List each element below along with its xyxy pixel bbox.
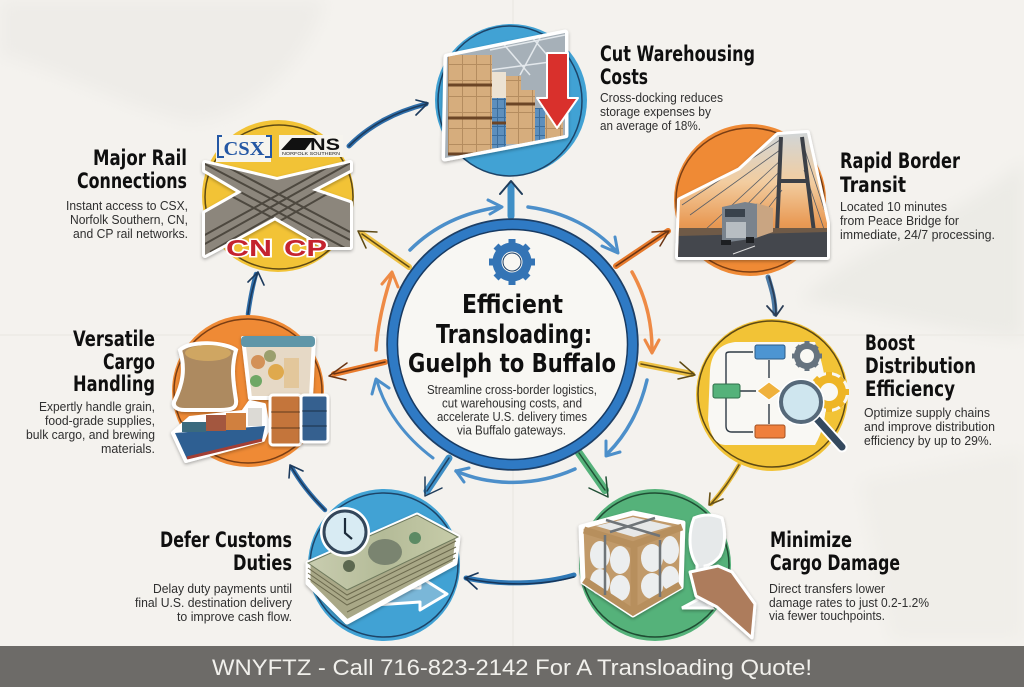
heading: Versatile bbox=[73, 327, 155, 351]
spoke: to cargo damage bbox=[579, 453, 608, 497]
description: Located 10 minutes bbox=[840, 200, 947, 214]
description: to improve cash flow. bbox=[177, 610, 292, 624]
hub ring bbox=[388, 220, 638, 470]
panel: defer customs duties bbox=[135, 489, 460, 641]
title: Transloading: bbox=[436, 320, 592, 350]
description: final U.S. destination delivery bbox=[135, 596, 293, 610]
CN CP logos: CN bbox=[226, 235, 272, 261]
description: Optimize supply chains bbox=[864, 406, 990, 420]
spoke: to bridge bbox=[616, 231, 669, 266]
description: Norfolk Southern, CN, bbox=[70, 213, 188, 227]
footer call to action: WNYFTZ - Call 716-823-2142 For A Transloading Quote! bbox=[212, 655, 812, 680]
icon: food container bbox=[241, 336, 315, 398]
central hub bbox=[388, 220, 638, 470]
warehouse illustration bbox=[445, 30, 578, 160]
arrow: rail to warehouse bbox=[349, 100, 428, 146]
arrow: distribution to cargo damage bbox=[709, 465, 739, 505]
spoke: to distribution bbox=[641, 362, 695, 379]
icon: grain sack bbox=[174, 343, 236, 410]
arrow: bridge to distribution bbox=[767, 277, 783, 316]
green circle bbox=[579, 489, 731, 641]
wine glass and hand illustration bbox=[682, 515, 755, 638]
panel: cut warehousing costs bbox=[435, 24, 755, 176]
title: Guelph to Buffalo bbox=[408, 349, 616, 379]
hub description bbox=[427, 383, 597, 438]
heading: Transit bbox=[840, 173, 906, 197]
heading: Defer Customs bbox=[160, 528, 292, 552]
spokes radiating from the central hub bbox=[329, 181, 695, 497]
blue circle bbox=[435, 24, 587, 176]
spoke: to customs duties bbox=[425, 458, 449, 496]
icon: red down arrow bbox=[537, 53, 578, 128]
flowchart illustration bbox=[708, 341, 849, 447]
rail crossing illustration bbox=[200, 135, 355, 261]
NS logo: NS bbox=[310, 135, 340, 154]
description: damage rates to just 0.2-1.2% bbox=[769, 596, 929, 610]
description: via fewer touchpoints. bbox=[769, 609, 885, 623]
CN CP logos: CP bbox=[284, 235, 327, 261]
NS logo bbox=[279, 135, 343, 157]
heading: Connections bbox=[77, 169, 187, 193]
description: Expertly handle grain, bbox=[39, 400, 155, 414]
padded crate illustration bbox=[581, 513, 683, 615]
heading: Efficiency bbox=[865, 377, 955, 401]
description: storage expenses by bbox=[600, 105, 712, 119]
heading: Costs bbox=[600, 65, 648, 89]
outer arrows connecting the benefit circles bbox=[248, 100, 783, 589]
description: Instant access to CSX, bbox=[66, 199, 188, 213]
description: materials. bbox=[101, 442, 155, 456]
icon: barrels bbox=[270, 395, 328, 445]
icon: arrow bbox=[375, 577, 447, 610]
spoke: to cargo handling bbox=[329, 362, 385, 380]
hub description: cut warehousing costs, and bbox=[442, 396, 582, 410]
heading: Duties bbox=[233, 551, 292, 575]
panel: minimize cargo damage bbox=[579, 489, 929, 641]
heading: Distribution bbox=[865, 354, 976, 378]
hub description: via Buffalo gateways. bbox=[457, 424, 566, 438]
orange circle bbox=[674, 124, 826, 276]
description: and CP rail networks. bbox=[73, 227, 188, 241]
cargo illustration bbox=[173, 336, 328, 461]
yellow circle bbox=[202, 120, 354, 272]
CSX logo bbox=[216, 135, 271, 162]
spoke: to rail bbox=[358, 231, 409, 267]
panel: boost distribution efficiency bbox=[696, 319, 995, 471]
icon: magnifier bbox=[779, 380, 842, 447]
description: Delay duty payments until bbox=[153, 582, 292, 596]
blue circle bbox=[308, 489, 460, 641]
description bbox=[600, 91, 723, 133]
heading: Cargo bbox=[103, 350, 155, 374]
description bbox=[66, 199, 188, 241]
description bbox=[840, 200, 995, 242]
heading: Major Rail bbox=[93, 146, 187, 170]
heading: Boost bbox=[865, 331, 915, 355]
orange circle bbox=[172, 315, 324, 467]
title: Efficient bbox=[462, 290, 563, 320]
description: Direct transfers lower bbox=[769, 582, 885, 596]
icon: clock bbox=[320, 507, 370, 557]
spoke: up to warehouse bbox=[500, 181, 522, 216]
NS logo: NORFOLK SOUTHERN bbox=[282, 151, 340, 156]
description: and improve distribution bbox=[864, 420, 995, 434]
heading: Cargo Damage bbox=[770, 551, 900, 575]
description: immediate, 24/7 processing. bbox=[840, 228, 995, 242]
description: food-grade supplies, bbox=[45, 414, 155, 428]
description bbox=[135, 582, 293, 624]
description: bulk cargo, and brewing bbox=[26, 428, 155, 442]
hub description: Streamline cross-border logistics, bbox=[427, 383, 597, 397]
panel: rapid border transit bbox=[674, 124, 995, 276]
icon: truck bbox=[721, 202, 773, 245]
heading: Minimize bbox=[770, 528, 852, 552]
description bbox=[769, 582, 929, 623]
hub description: accelerate U.S. delivery times bbox=[437, 410, 587, 424]
description: an average of 18%. bbox=[600, 119, 701, 133]
panel: versatile cargo handling bbox=[26, 315, 328, 467]
inner circular flow arrows bbox=[372, 200, 659, 482]
icon: yellow gear bbox=[809, 372, 849, 412]
heading: Rapid Border bbox=[840, 149, 960, 173]
icon: container ship bbox=[173, 402, 268, 461]
icon: gray gear bbox=[792, 341, 822, 371]
description bbox=[864, 406, 995, 448]
icon: gear bbox=[489, 239, 535, 285]
description bbox=[26, 400, 155, 456]
panel: major rail connections bbox=[66, 120, 355, 272]
heading: Handling bbox=[73, 372, 155, 396]
money stack illustration bbox=[308, 507, 458, 622]
heading: Cut Warehousing bbox=[600, 42, 755, 66]
description: from Peace Bridge for bbox=[840, 214, 959, 228]
yellow circle bbox=[696, 319, 848, 471]
arrow: customs duties to cargo handling bbox=[289, 465, 325, 510]
arrow: cargo handling to rail bbox=[248, 272, 264, 314]
description: Cross-docking reduces bbox=[600, 91, 723, 105]
CSX logo: CSX bbox=[224, 138, 265, 160]
description: efficiency by up to 29%. bbox=[864, 434, 992, 448]
arrow: cargo damage to customs duties bbox=[465, 573, 574, 589]
footer call to action bbox=[0, 646, 1024, 687]
bridge and truck illustration bbox=[675, 130, 830, 260]
